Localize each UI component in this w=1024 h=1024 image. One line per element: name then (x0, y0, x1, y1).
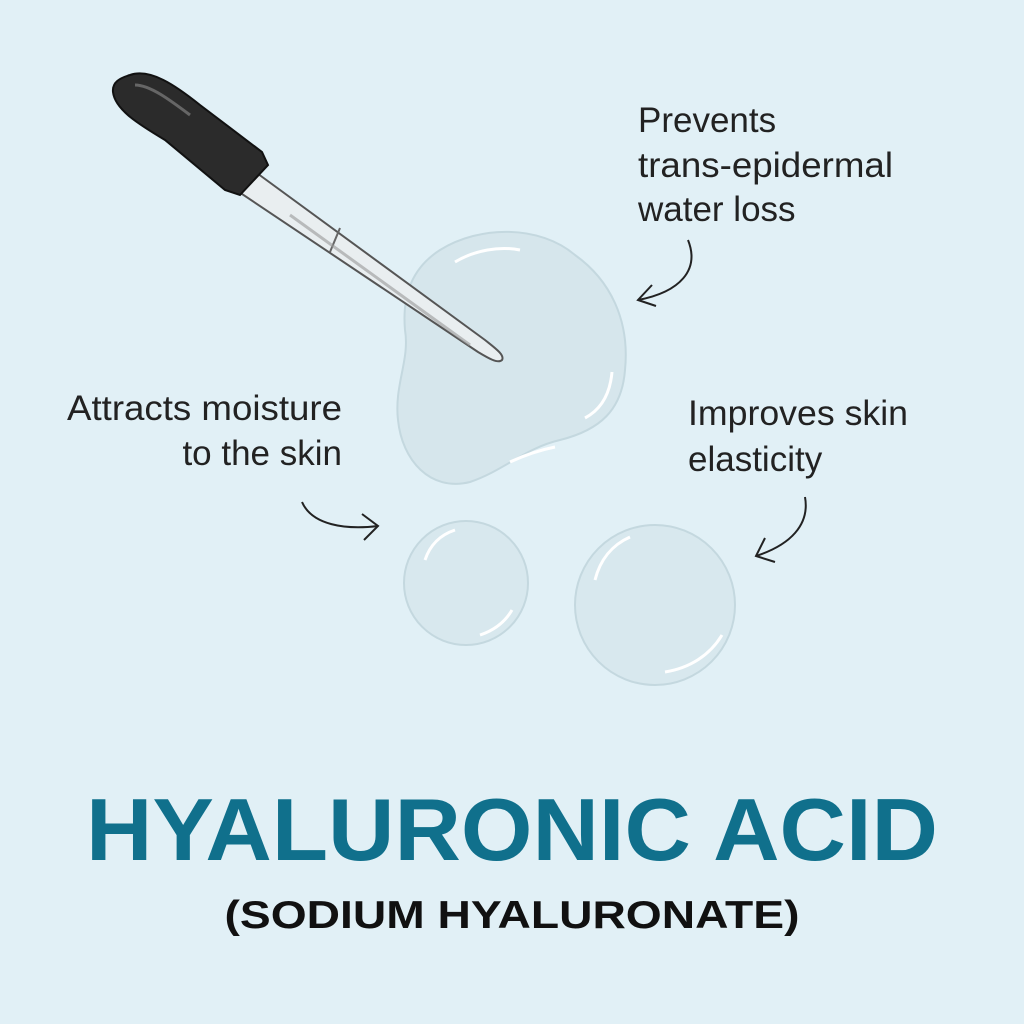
text: attracts moisture: Attracts moisture (67, 389, 342, 428)
blob: large droplet (397, 232, 626, 484)
text: attracts moisture: to the skin (182, 434, 342, 473)
arrow: to small droplet (302, 502, 378, 540)
text: improves elasticity: Improves skin (688, 394, 908, 433)
arrow: to blob top right (638, 240, 691, 306)
title: HYALURONIC ACID (86, 780, 938, 879)
icon: dropper (113, 73, 503, 361)
subtitle: (SODIUM HYALURONATE) (224, 894, 800, 937)
droplet: small left (404, 521, 528, 645)
text: improves elasticity (688, 394, 908, 479)
text: prevents water loss: Prevents (638, 101, 776, 140)
droplet: large right (575, 525, 735, 685)
arrow: to large droplet (756, 497, 806, 562)
text: prevents water loss: water loss (637, 190, 796, 229)
text: prevents water loss: trans-epidermal (638, 146, 893, 185)
text: improves elasticity: elasticity (688, 440, 823, 479)
text: prevents water loss (637, 101, 893, 229)
text: attracts moisture (67, 389, 342, 473)
